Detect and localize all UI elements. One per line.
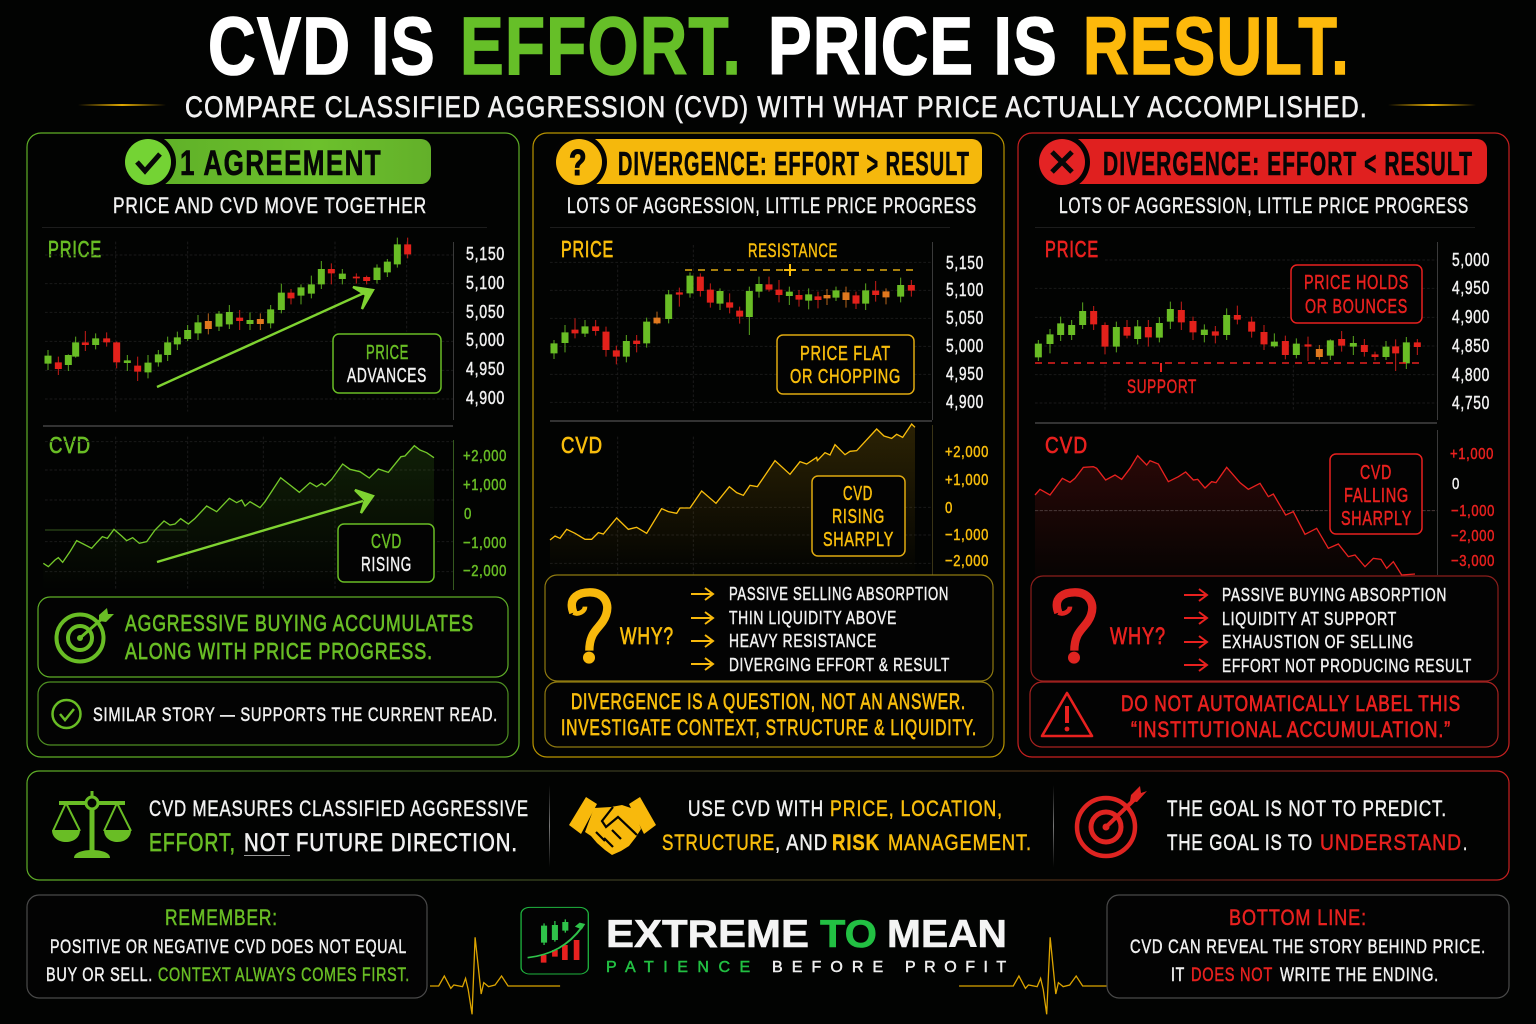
candlesticks: [45, 238, 453, 412]
cvd axis: +1,000: [463, 477, 507, 494]
price chart: divergence: PRICE: [561, 236, 614, 262]
why box: divergence: [545, 575, 993, 681]
cvd line: [43, 446, 434, 567]
cvd chart: agreement: [43, 432, 507, 590]
callout: divergence is a question: INVESTIGATE CONTEXT, STRUCTURE & LIQUIDITY.: [561, 715, 977, 740]
title: CVD IS: [208, 1, 436, 92]
price axis: 4,950: [466, 359, 505, 379]
cvd chart: divergence: CVD: [561, 432, 603, 458]
callout: price flat: [777, 335, 914, 394]
panel: remember: BUY OR SELL.: [46, 965, 153, 986]
price axis: [1437, 242, 1490, 420]
arrows: [1184, 589, 1207, 671]
logo: extreme to mean: MEAN: [887, 913, 1007, 956]
icon: logo mark: [521, 907, 588, 974]
subheading: PRICE AND CVD MOVE TOGETHER: [113, 193, 427, 218]
price chart: divergence: [550, 236, 984, 420]
cvd axis: −1,000: [463, 535, 507, 552]
cvd axis: −1,000: [1451, 503, 1495, 520]
price axis: 5,050: [946, 308, 984, 328]
callout: do not label: “INSTITUTIONAL ACCUMULATION.”: [1131, 717, 1451, 742]
price chart: agreement: PRICE: [48, 236, 102, 262]
price axis: 5,050: [466, 302, 505, 322]
cvd axis: −2,000: [463, 563, 507, 580]
callout: cvd rising sharply: CVD: [843, 483, 873, 505]
callout: price holds: OR BOUNCES: [1305, 296, 1408, 318]
cvd axis: 0: [464, 506, 472, 523]
title: EFFORT.: [460, 1, 742, 92]
takeaway: goal: [1167, 796, 1468, 855]
icon: question mark: [1057, 592, 1092, 664]
takeaway: goal: THE GOAL IS TO: [1167, 830, 1313, 855]
callout: cvd falling sharply: CVD: [1360, 462, 1392, 484]
why box: divergence 2: [1031, 576, 1498, 681]
logo: extreme to mean: PROFIT: [905, 959, 1007, 976]
subheading: LOTS OF AGGRESSION, LITTLE PRICE PROGRESS: [567, 193, 977, 218]
price axis: 4,750: [1452, 393, 1490, 413]
callout: aggressive buying: ALONG WITH PRICE PROGRESS.: [125, 638, 433, 664]
panel: agreement: [27, 133, 519, 757]
cvd area: [43, 446, 434, 590]
callout: price advances: PRICE: [366, 342, 409, 364]
price axis: [932, 242, 984, 420]
cvd chart: agreement: CVD: [49, 432, 91, 458]
price chart: agreement: [45, 236, 505, 420]
callout: cvd rising: [338, 524, 434, 582]
cvd axis: 0: [1452, 476, 1460, 493]
why box: divergence: THIN LIQUIDITY ABOVE: [729, 608, 897, 628]
callout: price holds: [1291, 265, 1422, 323]
callout: price flat: OR CHOPPING: [790, 366, 901, 388]
takeaway: use cvd with: STRUCTURE: [662, 830, 775, 855]
price axis: 5,100: [946, 280, 984, 300]
callout: aggressive buying: [38, 597, 508, 677]
price axis: 5,100: [466, 273, 505, 293]
takeaway: use cvd with: , AND: [775, 830, 828, 855]
price axis: 5,150: [466, 244, 505, 264]
takeaway: effort: EFFORT,: [149, 829, 236, 857]
panel: divergence effort greater than result: [533, 133, 1004, 757]
why box: divergence 2: PASSIVE BUYING ABSORPTION: [1222, 585, 1447, 605]
arrows: [691, 588, 713, 670]
cvd axis: [453, 440, 507, 590]
takeaway: effort: [149, 796, 529, 857]
takeaway: goal: THE GOAL IS NOT TO PREDICT.: [1167, 796, 1447, 821]
panel: remember: POSITIVE OR NEGATIVE CVD DOES NOT EQUAL: [50, 937, 407, 958]
logo: extreme to mean: EXTREME: [606, 913, 809, 956]
icon: handshake: [569, 797, 656, 855]
why box: divergence 2: LIQUIDITY AT SUPPORT: [1222, 609, 1397, 629]
takeaway: use cvd with: USE CVD WITH: [688, 796, 824, 821]
panel: bottom line: WRITE THE ENDING.: [1280, 965, 1439, 986]
header: divergence effort > result: [551, 134, 982, 190]
header: divergence effort < result: [1034, 134, 1487, 190]
callout: do not label: [1030, 682, 1498, 747]
panel: bottom line: [1107, 895, 1509, 998]
takeaway: use cvd with: RISK: [832, 830, 880, 855]
panel: remember: REMEMBER:: [165, 905, 278, 930]
callout: cvd rising: CVD: [371, 531, 402, 553]
takeaway: goal: .: [1463, 830, 1468, 855]
price axis: 4,900: [466, 388, 505, 408]
callout: price flat: PRICE FLAT: [800, 343, 891, 365]
why box: divergence: WHY?: [620, 623, 674, 650]
panel: remember: CONTEXT ALWAYS COMES FIRST.: [158, 965, 410, 986]
icon: target: [56, 608, 114, 662]
cvd axis: −1,000: [945, 527, 989, 544]
panel: key takeaways strip: [27, 771, 1509, 880]
title: PRICE IS: [768, 1, 1058, 92]
support line: SUPPORT: [1127, 377, 1197, 398]
logo: extreme to mean: BEFORE: [772, 959, 884, 976]
cvd axis: −2,000: [945, 553, 989, 570]
takeaway: use cvd with: [662, 796, 1032, 855]
price axis: 5,000: [946, 336, 984, 356]
takeaway: goal: UNDERSTAND: [1320, 830, 1462, 855]
callout: price holds: PRICE HOLDS: [1304, 272, 1409, 294]
title: RESULT.: [1083, 1, 1350, 92]
cvd axis: −2,000: [1451, 528, 1495, 545]
cvd axis: +1,000: [945, 472, 989, 489]
price axis: 5,000: [466, 330, 505, 350]
header: agreement: 1 AGREEMENT: [180, 144, 382, 183]
takeaway: use cvd with: MANAGEMENT.: [888, 830, 1032, 855]
cvd axis: 0: [945, 500, 953, 517]
header: divergence effort > result: ?: [569, 142, 588, 183]
takeaway: effort: FUTURE DIRECTION.: [296, 829, 518, 857]
why box: divergence: DIVERGING EFFORT & RESULT: [729, 655, 950, 675]
callout: divergence is a question: [545, 682, 993, 747]
resistance line: [685, 241, 916, 276]
cvd chart: divergence 2: [1035, 430, 1495, 577]
logo: extreme to mean: PATIENCE: [606, 959, 751, 976]
arrow: cvd up: [157, 490, 373, 562]
why box: divergence: PASSIVE SELLING ABSORPTION: [729, 584, 949, 604]
header: divergence effort > result: DIVERGENCE: EFFORT > RESULT: [618, 145, 970, 182]
callout: similar story: SIMILAR STORY — SUPPORTS THE CURRENT READ.: [93, 705, 498, 726]
title: [208, 1, 1350, 92]
panel: bottom line: IT: [1171, 965, 1185, 986]
callout: cvd rising sharply: SHARPLY: [823, 529, 894, 551]
header: agreement: [120, 134, 431, 190]
cvd axis: +1,000: [1450, 446, 1494, 463]
price axis: 4,900: [946, 392, 984, 412]
panel: divergence effort less than result: [1018, 133, 1509, 757]
arrow: price up: [157, 287, 373, 387]
price axis: 4,850: [1452, 336, 1490, 356]
callout: aggressive buying: AGGRESSIVE BUYING ACCUMULATES: [125, 610, 474, 636]
icon: red target: [1077, 786, 1147, 856]
takeaway: effort: CVD MEASURES CLASSIFIED AGGRESSIVE: [149, 796, 529, 821]
panel: bottom line: BOTTOM LINE:: [1229, 905, 1367, 930]
icon: check circle: [52, 700, 80, 728]
callout: cvd falling sharply: FALLING: [1344, 485, 1409, 507]
takeaway: use cvd with: PRICE, LOCATION,: [830, 796, 1003, 821]
cvd axis: [932, 425, 989, 575]
price axis: 4,900: [1452, 307, 1490, 327]
icon: question mark: [572, 592, 607, 664]
price axis: 5,150: [946, 253, 984, 273]
price axis: 5,000: [1452, 250, 1490, 270]
callout: cvd rising: RISING: [361, 554, 412, 576]
price chart: divergence 2: PRICE: [1045, 236, 1099, 262]
panel: bottom line: DOES NOT: [1191, 965, 1273, 986]
callout: similar story: [38, 682, 508, 745]
icon: scales: [52, 791, 131, 858]
cvd axis: +2,000: [945, 444, 989, 461]
heartbeat lines: [430, 937, 1107, 1014]
logo: extreme to mean: [521, 907, 1007, 976]
callout: cvd rising sharply: RISING: [832, 506, 885, 528]
price axis: 4,800: [1452, 365, 1490, 385]
callout: cvd rising sharply: [812, 476, 905, 556]
price axis: [453, 242, 505, 420]
logo: extreme to mean: TO: [820, 913, 877, 956]
cvd chart: divergence 2: CVD: [1045, 432, 1088, 458]
callout: price advances: ADVANCES: [347, 365, 427, 387]
why box: divergence 2: EXHAUSTION OF SELLING: [1222, 632, 1414, 652]
panel: remember: [27, 895, 427, 998]
price axis: 4,950: [1452, 278, 1490, 298]
cvd chart: divergence: [550, 424, 989, 577]
callout: divergence is a question: DIVERGENCE IS A QUESTION, NOT AN ANSWER.: [571, 689, 966, 714]
callout: price advances: [333, 334, 441, 393]
cvd axis: −3,000: [1451, 553, 1495, 570]
callout: cvd falling sharply: SHARPLY: [1341, 508, 1412, 530]
why box: divergence: HEAVY RESISTANCE: [729, 631, 877, 651]
resistance line: RESISTANCE: [748, 241, 838, 262]
takeaway: effort: NOT: [244, 829, 290, 857]
price chart: divergence 2: [1035, 236, 1490, 420]
why box: divergence 2: WHY?: [1110, 623, 1166, 650]
cvd axis: +2,000: [463, 448, 507, 465]
cvd axis: [1437, 430, 1495, 575]
icon: warning triangle: [1042, 693, 1092, 736]
callout: cvd falling sharply: [1330, 454, 1422, 534]
price axis: 4,950: [946, 364, 984, 384]
